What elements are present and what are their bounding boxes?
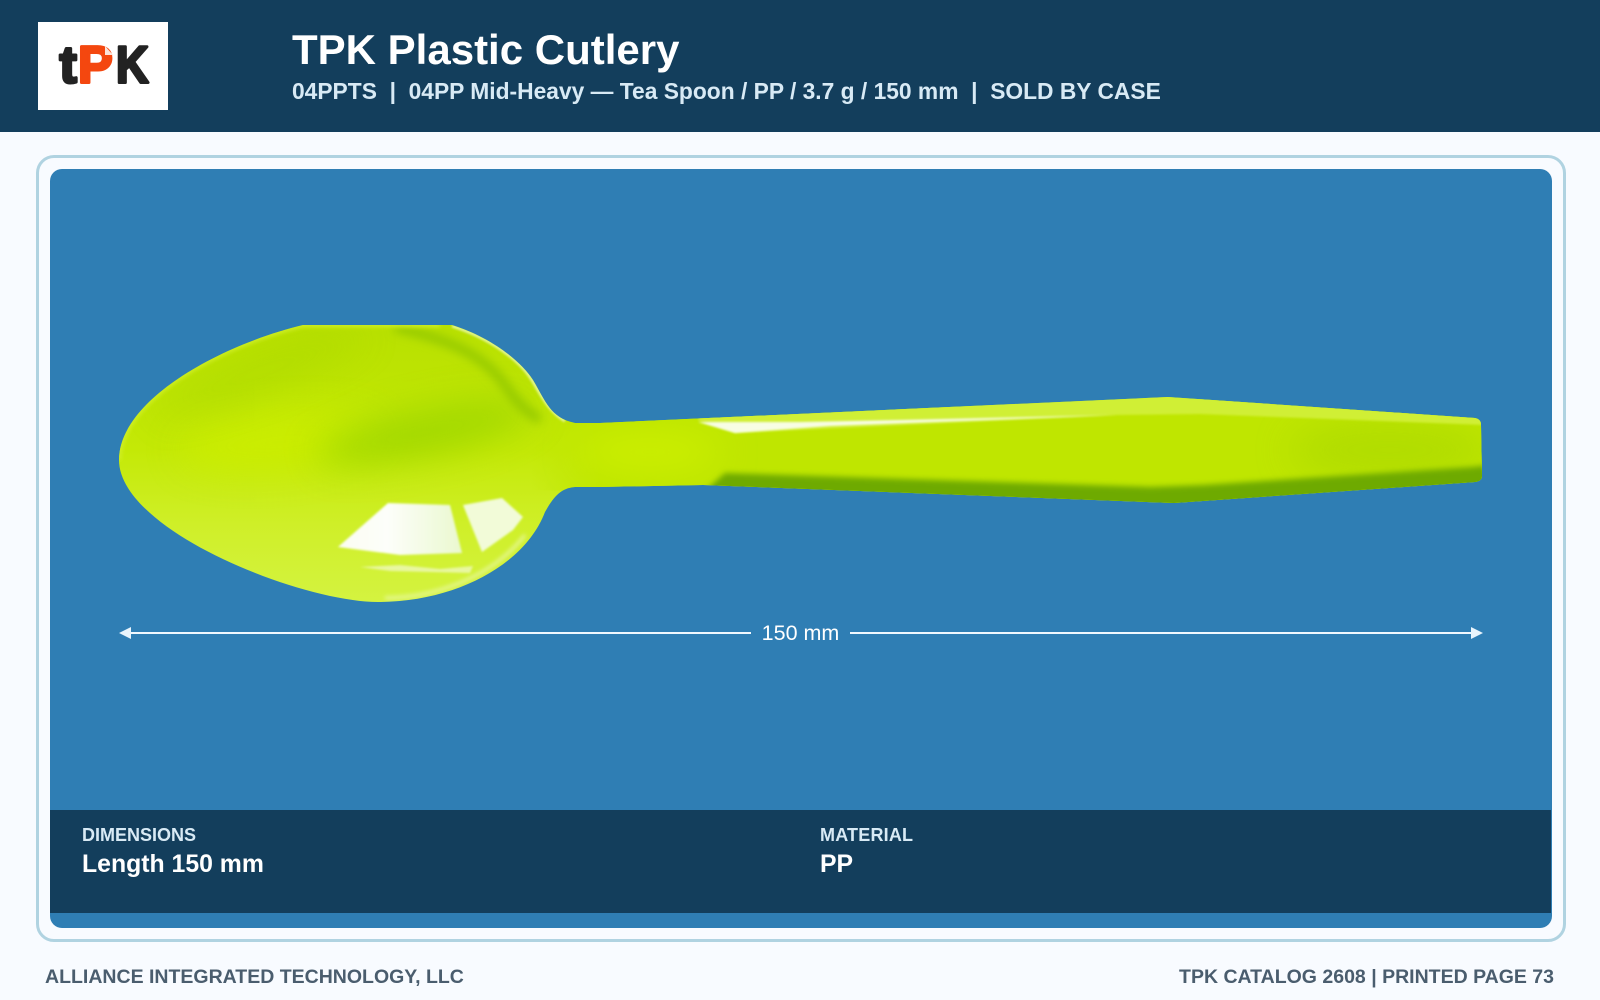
footer left: ALLIANCE INTEGRATED TECHNOLOGY, LLC (45, 966, 464, 988)
dimensions spec: Length 150 mm (82, 851, 264, 878)
logo: P (78, 36, 113, 94)
title: TPK Plastic Cutlery (292, 26, 679, 73)
dimension arrow: 150 mm (762, 621, 839, 645)
bowl glare left (338, 503, 462, 555)
dimension arrow (119, 621, 1483, 645)
handle upper facet (697, 397, 1481, 434)
material spec: PP (820, 851, 853, 878)
logo (38, 22, 168, 110)
material spec: MATERIAL (820, 825, 913, 845)
dimensions spec: DIMENSIONS (82, 825, 196, 845)
logo: K (116, 37, 149, 94)
bowl glare lower (360, 565, 473, 573)
spoon (100, 320, 1500, 610)
handle base (555, 399, 1482, 503)
subtitle: 04PPTS | 04PP Mid-Heavy — Tea Spoon / PP / 3.7 g / 150 mm | SOLD BY CASE (292, 78, 1161, 104)
panel: product photo area (50, 169, 1552, 928)
dimensions spec (82, 825, 264, 878)
handle shadow (707, 462, 1482, 503)
panel frame (36, 155, 1566, 942)
handle glare (698, 415, 1117, 433)
product illustration and dimension arrow (119, 325, 1483, 640)
footer right: TPK CATALOG 2608 | PRINTED PAGE 73 (1179, 966, 1554, 988)
header band (0, 0, 1600, 132)
logo: t (60, 36, 77, 94)
specification band (50, 810, 1551, 913)
bowl glare right (463, 498, 523, 552)
material spec (820, 825, 913, 878)
